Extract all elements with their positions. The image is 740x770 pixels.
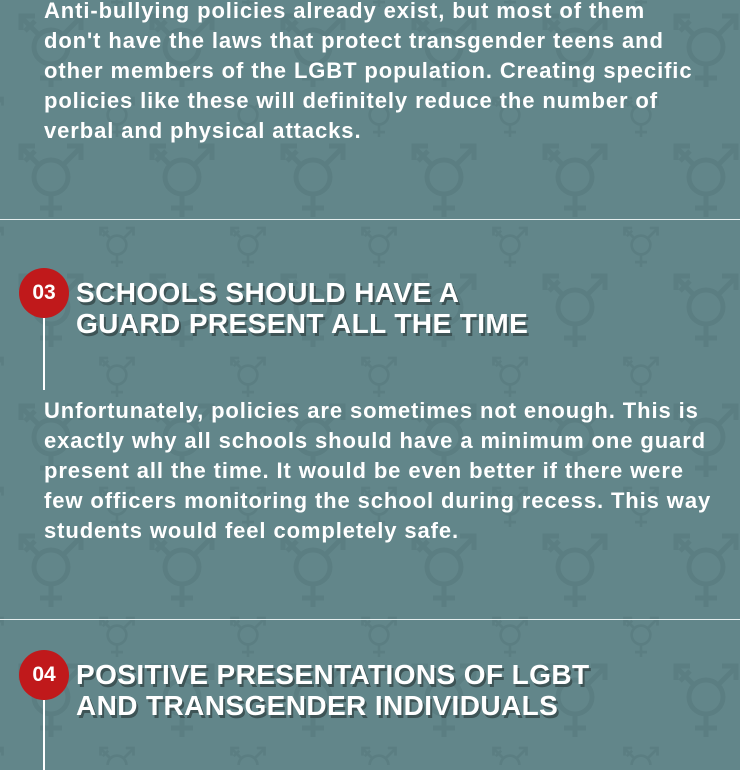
- text block: anti-bullying policies: other members of the LGBT population. Creating specific: [44, 58, 692, 83]
- text block 03: exactly why all schools should have a minimum one guard: [44, 428, 706, 453]
- text block: anti-bullying policies: policies like these will definitely reduce the number of: [44, 88, 658, 113]
- heading 03: [76, 277, 529, 339]
- text block: anti-bullying policies: don't have the laws that protect transgender teens and: [44, 28, 664, 53]
- heading 04: [76, 659, 591, 721]
- badge 04: [19, 650, 69, 700]
- text block 03: present all the time. It would be even better if there were: [44, 458, 684, 483]
- heading 03: GUARD PRESENT ALL THE TIME: [76, 308, 528, 339]
- heading 04: AND TRANSGENDER INDIVIDUALS: [76, 690, 558, 721]
- text block: anti-bullying policies: [44, 0, 692, 143]
- badge 03: 03: [32, 281, 56, 304]
- heading 03: SCHOOLS SHOULD HAVE A: [76, 277, 459, 308]
- text block: anti-bullying policies: verbal and physical attacks.: [44, 118, 361, 143]
- text block 03: few officers monitoring the school during recess. This way: [44, 488, 711, 513]
- text block 03: Unfortunately, policies are sometimes not enough. This is: [44, 398, 699, 423]
- badge 03: [19, 268, 69, 318]
- text block 03: [44, 398, 711, 543]
- text block 03: students would feel completely safe.: [44, 518, 459, 543]
- heading 04: POSITIVE PRESENTATIONS OF LGBT: [76, 659, 589, 690]
- section 04: [19, 650, 591, 770]
- badge 04: 04: [32, 663, 56, 686]
- section 03: [19, 268, 711, 543]
